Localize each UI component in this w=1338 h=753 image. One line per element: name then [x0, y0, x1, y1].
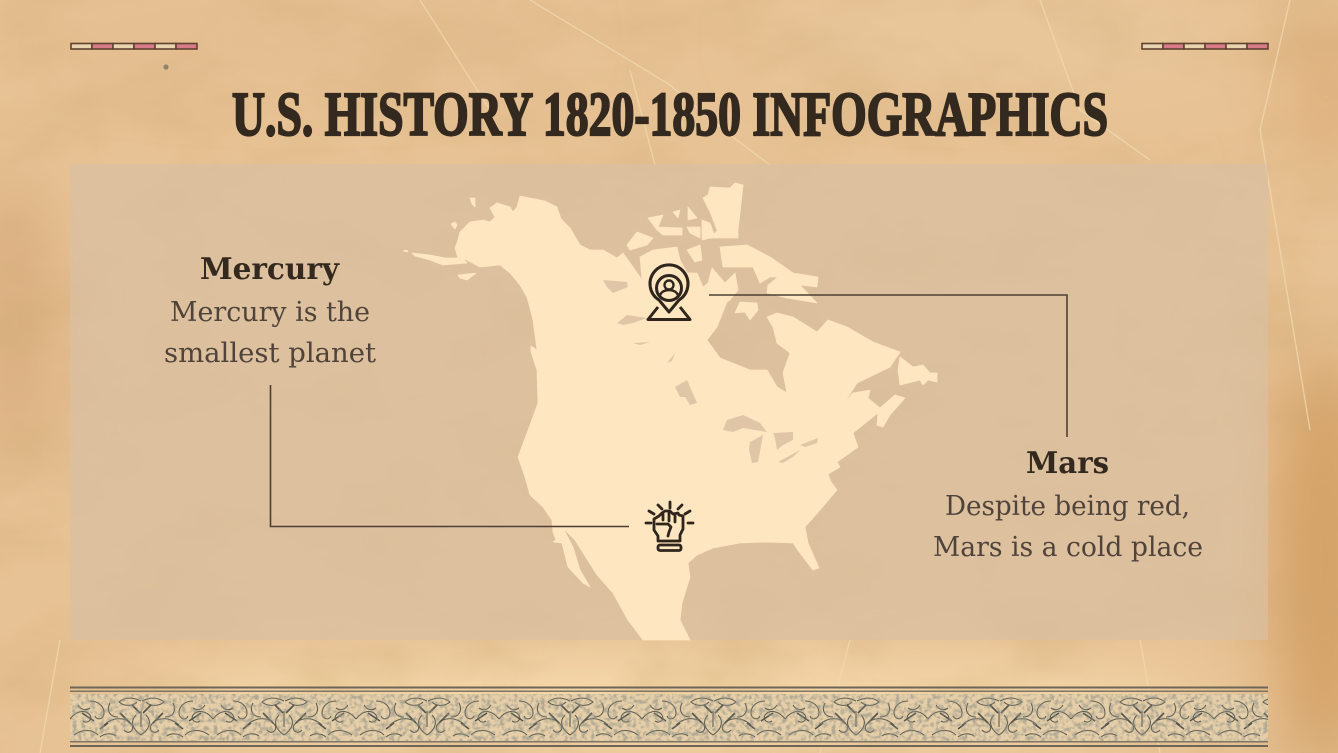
text block: Mercury: Mercury is the [170, 297, 370, 328]
icon: map pin with person [648, 265, 690, 320]
connector: pin icon to Mars [709, 295, 1067, 437]
map: North America [403, 183, 937, 640]
connector: Mercury to fist icon [270, 385, 629, 526]
panel: map background [70, 164, 1268, 640]
text block: Mars: Mars is a cold place [933, 532, 1203, 563]
icon: raised fist [646, 502, 693, 550]
text block: Mercury: Mercury [200, 252, 341, 287]
map: lakes [603, 280, 818, 463]
text block: Mercury [164, 252, 376, 369]
text block: Mercury: smallest planet [164, 338, 376, 369]
text block: Mars [933, 446, 1203, 563]
text block: Mars: Despite being red, [945, 491, 1190, 522]
decorative bar: top right [1142, 44, 1268, 49]
text block: Mars: Mars [1026, 446, 1109, 481]
decorative bar: top left [71, 44, 197, 49]
ornamental border [70, 686, 1268, 747]
arctic islands [627, 183, 818, 320]
